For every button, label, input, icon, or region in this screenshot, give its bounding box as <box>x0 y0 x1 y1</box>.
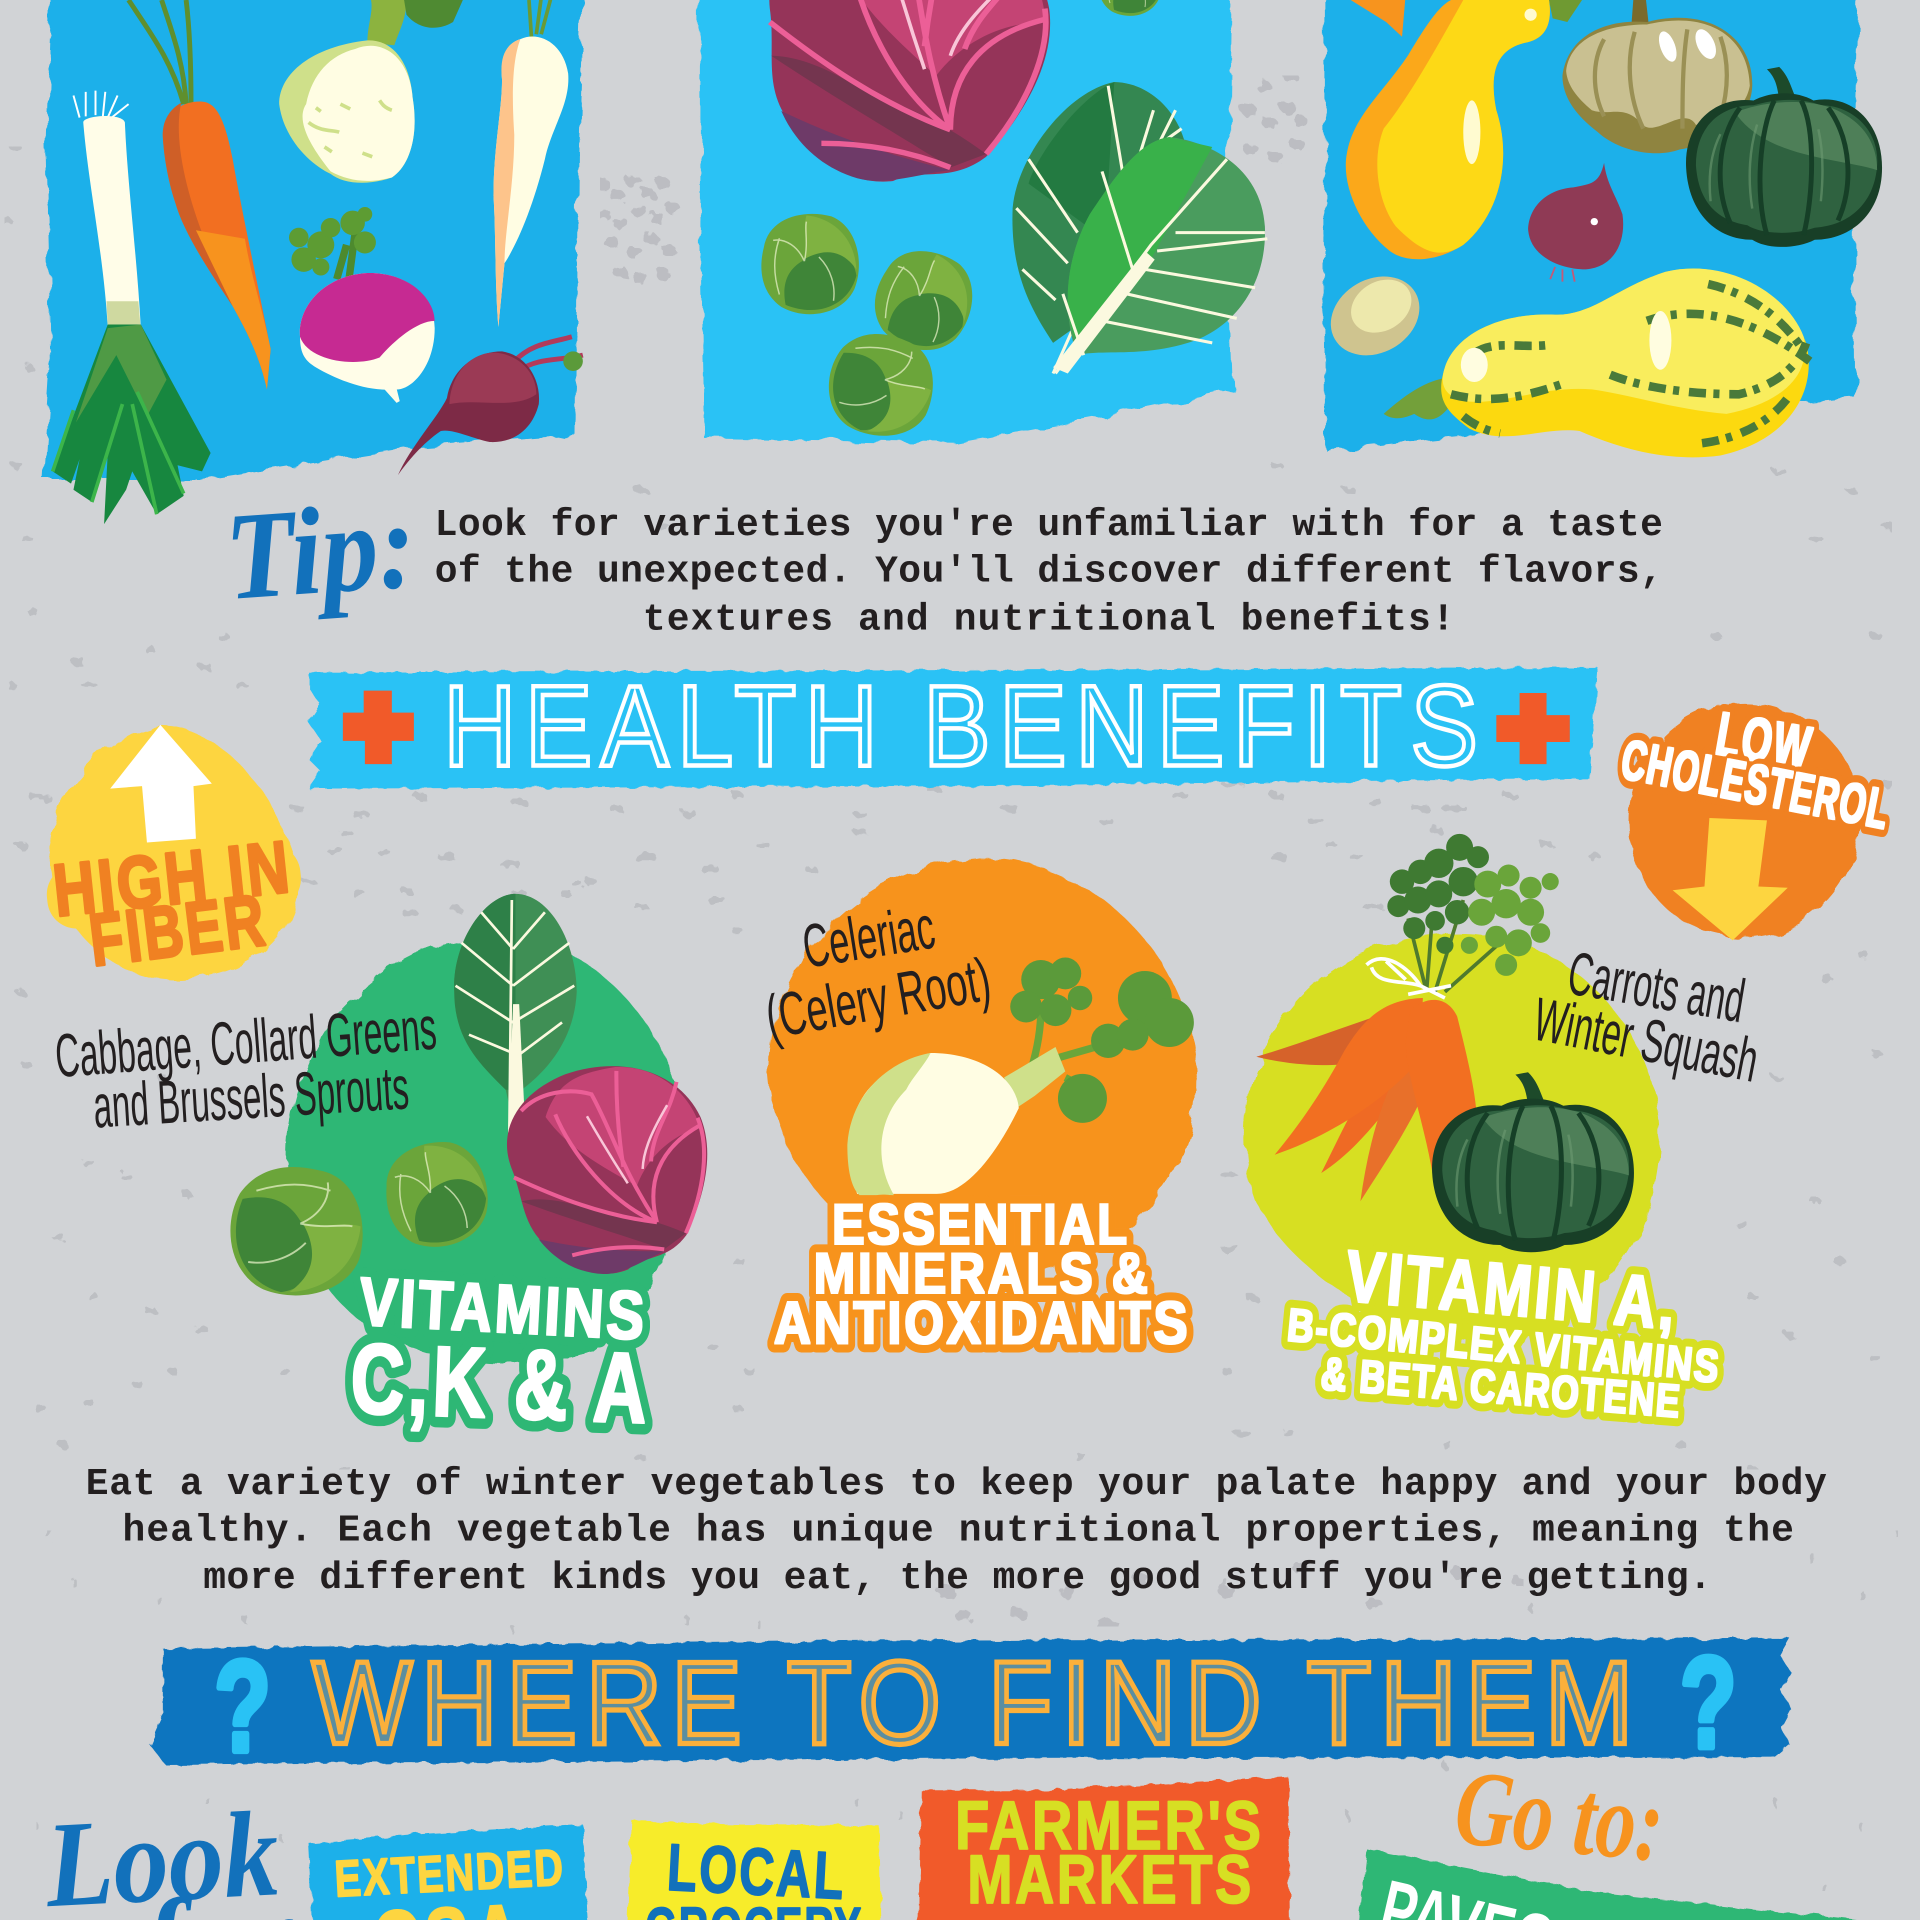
paragraph: eat a variety: Eat a variety of winter vegetables to keep your palate happy and your body <box>86 1463 1827 1506</box>
heading: where to find them: WHERE TO FIND THEM <box>312 1638 1642 1769</box>
icon: down arrow <box>1673 818 1788 940</box>
icon: parsnip <box>493 0 568 327</box>
card: local grocery <box>627 1821 882 1920</box>
paragraph: eat a variety: more different kinds you eat, the more good stuff you're getting. <box>203 1557 1712 1600</box>
icon: celeriac <box>279 0 463 183</box>
icon: right cross <box>1496 693 1570 764</box>
icon: tan pumpkin <box>1562 0 1752 153</box>
icon: right question mark: ? <box>1680 1630 1741 1775</box>
tip text: Look for varieties you're unfamiliar with for a taste <box>435 504 1663 547</box>
badge: low cholesterol <box>1617 699 1895 940</box>
lime brush circle <box>1244 933 1659 1342</box>
icon: collard greens <box>1012 82 1267 373</box>
icon: onion <box>1528 163 1623 282</box>
label: cabbage and greens: and Brussels Sprouts <box>91 1053 411 1141</box>
card: farmers markets: FARMER'S <box>955 1787 1264 1864</box>
icon: yellow crookneck squash <box>1346 0 1582 259</box>
icon: delicata squash <box>1384 269 1810 457</box>
benefit text: & BETA CAROTENE <box>1319 1347 1683 1427</box>
benefit: vitamin a <box>1244 834 1764 1427</box>
icon: brussels sprout three <box>821 326 941 444</box>
benefit text <box>774 1193 1190 1356</box>
icon: collard leaf <box>454 894 577 1133</box>
icon: left cross <box>343 691 414 764</box>
orange brush circle <box>769 857 1196 1276</box>
label: cabbage and greens: Cabbage, Collard Greens <box>53 994 439 1090</box>
benefit text: VITAMINS <box>358 1263 649 1355</box>
icon: carrot <box>129 0 271 389</box>
tip text: of the unexpected. You'll discover different flavors, <box>435 551 1663 594</box>
tip text <box>435 504 1663 641</box>
icon: green pumpkin <box>1432 1072 1634 1252</box>
badge text: HIGH IN <box>49 825 296 932</box>
icon: small root <box>1316 261 1434 371</box>
benefit text <box>349 1263 653 1445</box>
icon: carrot greens <box>1387 834 1559 992</box>
heading: health benefits: HEALTH BENEFITS <box>443 662 1487 790</box>
benefit text: MINERALS & <box>814 1242 1150 1306</box>
benefit: vitamins <box>53 894 734 1445</box>
icon: red cabbage <box>491 1043 734 1292</box>
label: carrots and squash: Carrots and <box>1563 939 1750 1035</box>
icon: left question mark: ? <box>214 1634 276 1779</box>
badge text <box>49 825 296 982</box>
benefit text: C,K & A <box>349 1323 653 1445</box>
script heading: go to: Go to: <box>1451 1748 1668 1885</box>
badge text: LOW <box>1712 699 1817 783</box>
banner: where to find them <box>149 1630 1790 1779</box>
icon: brussels sprout <box>230 1167 363 1295</box>
card: extended csa <box>309 1824 588 1920</box>
text backing <box>44 842 304 932</box>
benefit text: VITAMIN A, <box>1343 1234 1682 1346</box>
icon: orange vegetable tip <box>1341 0 1406 37</box>
blue brush background <box>44 0 583 480</box>
label: celeriac <box>761 893 995 1051</box>
icon: celeriac with leaves <box>847 958 1194 1195</box>
icon: brussels sprout two <box>862 238 985 363</box>
badge text <box>1617 699 1895 841</box>
card: local grocery: LOCAL <box>665 1831 848 1914</box>
badge: high in fiber <box>44 725 304 982</box>
icon: up arrow <box>110 725 212 842</box>
label: celeriac: Celeriac <box>798 893 939 981</box>
icon: brussels sprout <box>378 1135 496 1255</box>
benefit text: ANTIOXIDANTS <box>774 1289 1190 1356</box>
benefit text <box>1285 1234 1723 1427</box>
tip heading: Tip: <box>221 476 420 627</box>
card: farmers markets: MARKETS <box>967 1841 1254 1918</box>
icon: beet <box>398 337 583 475</box>
panel: winter squash <box>1316 0 1882 457</box>
benefit: minerals <box>761 857 1196 1356</box>
icon: top sprout <box>1098 0 1161 16</box>
paragraph: eat a variety: healthy. Each vegetable has unique nutritional properties, meaning the <box>122 1509 1794 1552</box>
panel: leafy greens <box>700 0 1267 444</box>
badge text: FIBER <box>85 878 271 982</box>
benefit text: B-COMPLEX VITAMINS <box>1285 1299 1723 1393</box>
panel: root vegetables <box>44 0 583 524</box>
icon: green acorn squash <box>1686 67 1882 247</box>
icon: carrot bunch <box>1256 959 1477 1201</box>
paragraph: eat a variety <box>86 1463 1827 1600</box>
icon: turnip <box>289 207 435 402</box>
banner: health benefits <box>309 662 1598 790</box>
green brush circle <box>288 937 684 1363</box>
icon: brussels sprout one <box>761 214 859 314</box>
card: farmers markets <box>918 1777 1291 1920</box>
icon: red cabbage <box>769 0 1050 182</box>
label: cabbage and greens <box>53 994 439 1141</box>
label: carrots and squash <box>1528 939 1764 1095</box>
card: extended csa: EXTENDED <box>333 1838 566 1908</box>
blue brush background <box>700 0 1232 443</box>
tip text: textures and nutritional benefits! <box>643 598 1455 641</box>
blue brush background <box>1325 0 1859 451</box>
icon: leek <box>53 91 211 524</box>
label: celeriac: (Celery Root) <box>761 945 995 1051</box>
benefit text: ESSENTIAL <box>832 1193 1130 1257</box>
